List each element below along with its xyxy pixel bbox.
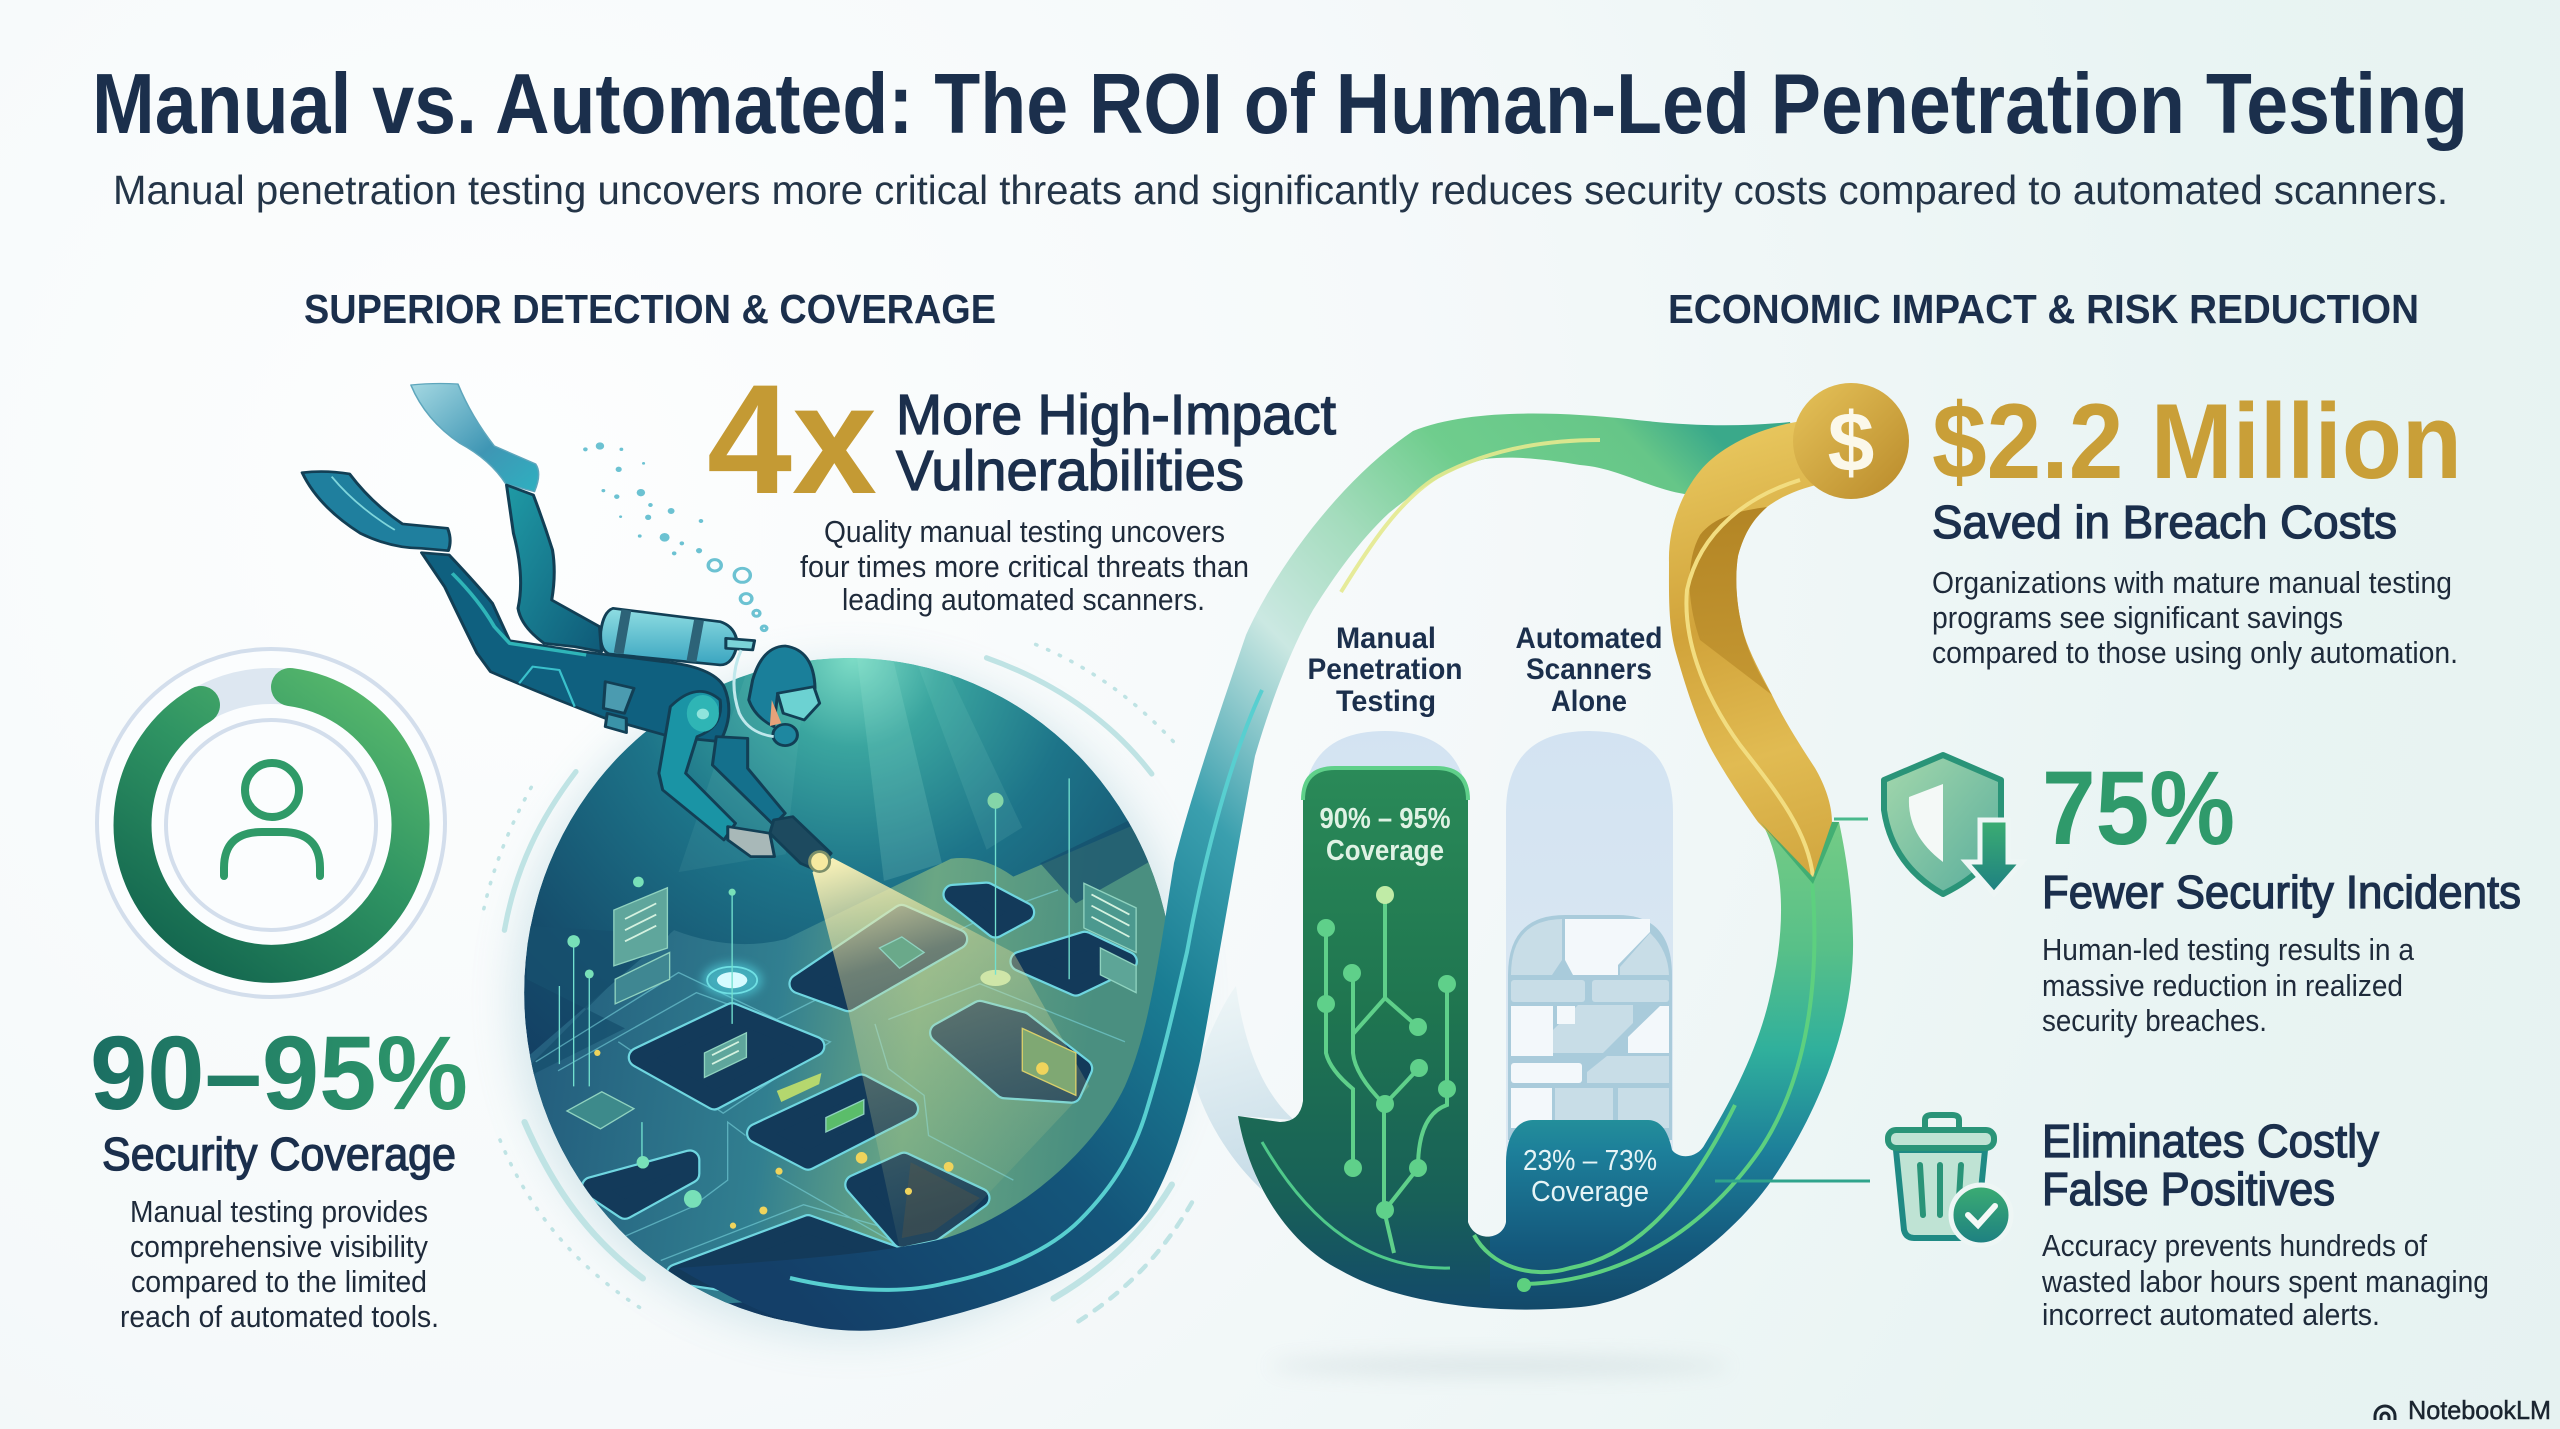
icon: coverage ring with person — [97, 649, 445, 997]
subtitle: Manual penetration testing uncovers more critical threats and significantly reduces security costs compared to automated scanners. — [113, 167, 2448, 213]
upper leg — [507, 485, 601, 652]
description: massive reduction in realized — [2042, 968, 2403, 1003]
description: programs see significant savings — [1932, 600, 2343, 635]
icon: shield with down arrow — [1884, 755, 2022, 894]
panel: fewer incidents — [1884, 750, 2521, 1038]
circuit tree in manual bar — [1317, 886, 1456, 1253]
chart labels — [1308, 622, 1662, 718]
description: Quality manual testing uncovers — [824, 514, 1225, 549]
chart labels: Manual — [1336, 622, 1436, 655]
icon: scuba diver — [302, 384, 831, 872]
circuit road network — [530, 826, 1166, 1304]
description: Organizations with mature manual testing — [1932, 565, 2452, 600]
bubbles — [583, 442, 767, 631]
description: wasted labor hours spent managing — [2041, 1264, 2489, 1299]
panel: 4x vulnerabilities — [707, 353, 1336, 617]
illustration: underwater network scene — [482, 644, 1196, 1335]
air tank — [601, 608, 737, 665]
value label: automated coverage — [1523, 1145, 1657, 1208]
stat heading — [2042, 1115, 2379, 1215]
description: Accuracy prevents hundreds of — [2042, 1228, 2427, 1263]
chart labels: Penetration — [1308, 653, 1462, 686]
head and mask — [749, 646, 815, 727]
description: Manual testing provides — [130, 1194, 428, 1229]
road trace lines — [536, 890, 1125, 1260]
stat heading: Eliminates Costly — [2042, 1115, 2379, 1167]
signal pins — [559, 778, 1069, 1208]
light rays — [857, 658, 942, 881]
stat: 75%: 75% — [2042, 750, 2235, 867]
bowl containing both bars — [1238, 770, 1854, 1310]
chart labels: Testing — [1336, 685, 1436, 718]
description: four times more critical threats than — [800, 549, 1249, 584]
stat heading — [896, 383, 1336, 503]
chart labels: Alone — [1551, 685, 1627, 718]
bar track: automated — [1506, 731, 1673, 1200]
glowing node — [702, 962, 762, 998]
value label: manual coverage: 90% – 95% — [1320, 803, 1451, 835]
stat label: Saved in Breach Costs — [1932, 496, 2397, 548]
section heading: detection: SUPERIOR DETECTION & COVERAGE — [304, 286, 996, 332]
pale ghost band behind bars — [1193, 986, 1294, 1190]
bar track: manual — [1303, 731, 1468, 1000]
stat label: Fewer Security Incidents — [2042, 866, 2521, 918]
description: compared to the limited — [131, 1264, 427, 1299]
comparison chart: manual vs automated bars — [1238, 626, 1854, 1310]
hand — [728, 827, 774, 857]
section heading: economic: ECONOMIC IMPACT & RISK REDUCTION — [1668, 286, 2419, 332]
description — [800, 514, 1249, 617]
description — [120, 1194, 439, 1334]
stat: 90-95%: 90–95% — [90, 1015, 468, 1132]
flashlight — [770, 817, 831, 870]
stat label: Security Coverage — [102, 1128, 456, 1180]
description: incorrect automated alerts. — [2042, 1297, 2380, 1332]
brick wall illustration — [1508, 915, 1672, 1140]
value label: manual coverage — [1320, 803, 1451, 867]
description: comprehensive visibility — [130, 1229, 428, 1264]
watermark: NotebookLM: NotebookLM — [2408, 1395, 2551, 1425]
description: Human-led testing results in a — [2042, 932, 2415, 967]
ground shadow — [1270, 1356, 1730, 1376]
value label: automated coverage: Coverage — [1531, 1176, 1649, 1208]
arms — [712, 737, 785, 825]
pits — [592, 892, 1127, 1294]
description: reach of automated tools. — [120, 1299, 439, 1334]
stat: 4x: 4x — [707, 353, 877, 527]
stat heading: Vulnerabilities — [896, 439, 1244, 503]
shoulder — [687, 695, 719, 732]
icon: dollar coin: $ — [1828, 395, 1874, 489]
panel: security coverage — [90, 649, 468, 1334]
description — [2041, 1228, 2489, 1332]
gold ribbon — [1669, 422, 1850, 884]
icon: dollar coin — [1793, 383, 1909, 499]
chart labels: Automated — [1516, 622, 1662, 655]
connector lines — [1715, 819, 1870, 1181]
description: compared to those using only automation. — [1932, 635, 2458, 670]
description: leading automated scanners. — [842, 582, 1205, 617]
decorative sonar arcs — [482, 644, 1192, 1323]
stat heading: More High-Impact — [896, 383, 1336, 447]
lower leg and torso — [422, 553, 729, 742]
fins — [411, 384, 539, 492]
description: security breaches. — [2042, 1003, 2267, 1038]
flowing ribbon from scene to coin — [678, 414, 1810, 1331]
description — [2042, 932, 2415, 1038]
data panels — [567, 883, 1136, 1132]
panel: breach cost savings — [1932, 381, 2462, 670]
value label: automated coverage: 23% – 73% — [1523, 1145, 1657, 1177]
stat heading: False Positives — [2042, 1163, 2335, 1215]
description — [1932, 565, 2458, 670]
chart labels: Scanners — [1526, 653, 1652, 686]
value label: manual coverage: Coverage — [1326, 835, 1444, 867]
harness pack — [603, 682, 634, 713]
icon: trash can with check — [1888, 1115, 2011, 1245]
stat: $2.2 million: $2.2 Million — [1932, 381, 2462, 501]
panel: false positives — [1888, 1115, 2489, 1332]
flashlight beam — [812, 858, 1089, 1258]
